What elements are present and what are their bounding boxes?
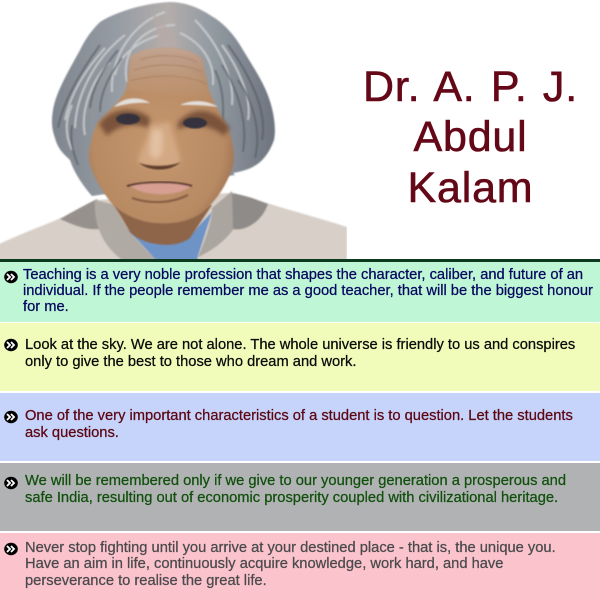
quote panel: sky — [0, 323, 600, 391]
divider rule — [0, 259, 600, 262]
quote text — [25, 540, 556, 589]
portrait of Dr. Kalam — [0, 1, 347, 259]
quote panel: younger generation — [0, 463, 600, 531]
quote text: ask questions. — [25, 425, 119, 441]
shirt — [128, 212, 212, 262]
face — [89, 48, 234, 223]
title: Dr. A. P. J. — [363, 62, 578, 110]
nose — [138, 122, 181, 168]
bullet icon — [4, 270, 18, 284]
quote text: for me. — [23, 299, 69, 315]
quote text — [25, 408, 573, 441]
quote text: We will be remembered only if we give to our younger generation a prosperous and — [25, 473, 566, 489]
quote text: Look at the sky. We are not alone. The whole universe is friendly to us and conspires — [25, 337, 575, 353]
mouth — [127, 182, 192, 202]
quote text: Have an aim in life, continuously acquire knowledge, work hard, and have — [25, 556, 503, 572]
quote text: only to give the best to those who dream and work. — [25, 354, 356, 370]
quote panel: student — [0, 393, 600, 461]
title: Kalam — [408, 164, 533, 212]
neck — [114, 205, 212, 245]
bullet icon — [4, 338, 18, 352]
quote panel: never stop fighting — [0, 533, 600, 600]
quote text: safe India, resulting out of economic prosperity coupled with civilizational heritage. — [25, 490, 558, 506]
hair — [52, 2, 275, 196]
quote text: Teaching is a very noble profession that shapes the character, caliber, and future of an — [23, 267, 583, 283]
title — [363, 62, 578, 212]
quote text: Never stop fighting until you arrive at your destined place - that is, the unique you. — [25, 540, 556, 556]
quote text: individual. If the people remember me as a good teacher, that will be the biggest honour — [23, 283, 593, 299]
quote text — [25, 473, 566, 506]
quote text — [23, 267, 593, 315]
eyes — [116, 114, 140, 124]
nostril shadow — [139, 162, 181, 170]
bullet icon — [4, 542, 18, 556]
bullet icon — [4, 410, 18, 424]
bullet icon — [4, 476, 18, 490]
quote text: One of the very important characteristics of a student is to question. Let the students — [25, 408, 573, 424]
coat — [0, 191, 347, 262]
quote text — [25, 337, 575, 370]
eye sockets — [99, 110, 230, 136]
quote panel: teaching — [0, 262, 600, 322]
title: Abdul — [414, 113, 527, 161]
quote text: perseverance to realise the great life. — [25, 573, 267, 589]
brows — [114, 98, 218, 107]
